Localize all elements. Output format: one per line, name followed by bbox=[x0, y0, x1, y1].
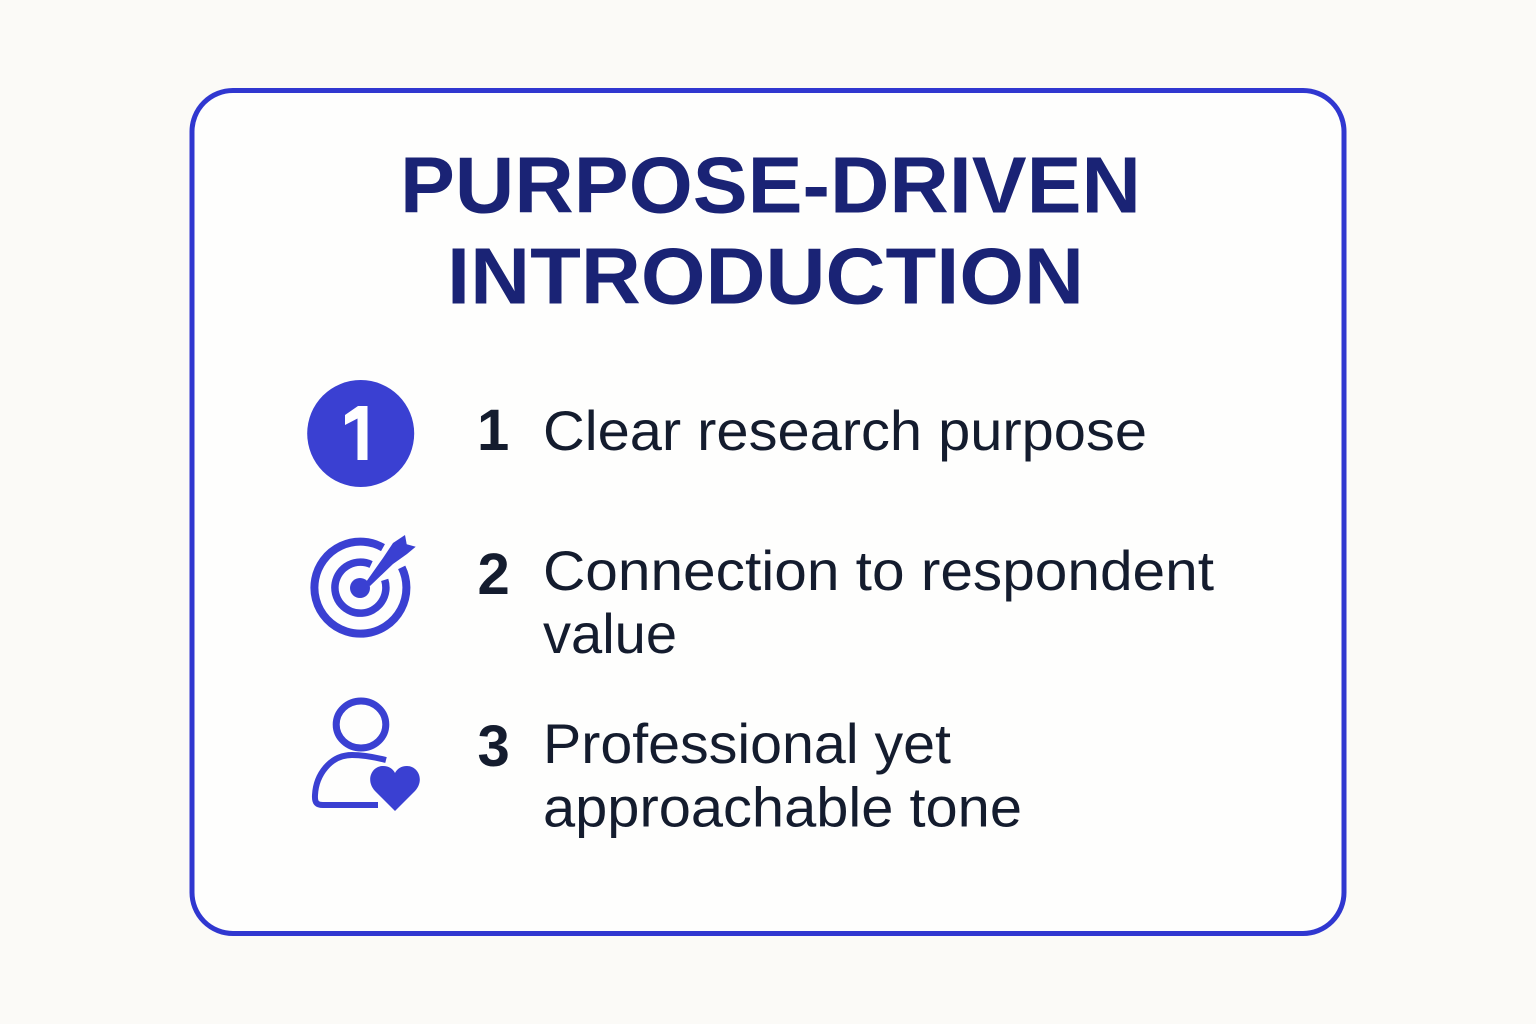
title: PURPOSE-DRIVEN bbox=[400, 140, 1141, 230]
icon: numbered circle bbox=[307, 380, 414, 487]
item 2: value bbox=[543, 602, 677, 665]
item 1: Clear research purpose bbox=[543, 399, 1147, 462]
item 2 bbox=[478, 539, 1214, 665]
item 3: approachable tone bbox=[543, 776, 1022, 838]
item 2: 2 bbox=[478, 542, 510, 607]
item 3: 3 bbox=[478, 714, 510, 779]
item 3 bbox=[478, 712, 1022, 838]
icon: target with arrow bbox=[314, 535, 416, 634]
item 1: 1 bbox=[477, 398, 509, 463]
title: INTRODUCTION bbox=[447, 232, 1084, 320]
title bbox=[400, 140, 1141, 320]
item 2: Connection to respondent bbox=[543, 539, 1214, 602]
item 3: Professional yet bbox=[543, 712, 951, 775]
panel: card bbox=[192, 90, 1344, 934]
icon: person with heart bbox=[315, 701, 420, 811]
